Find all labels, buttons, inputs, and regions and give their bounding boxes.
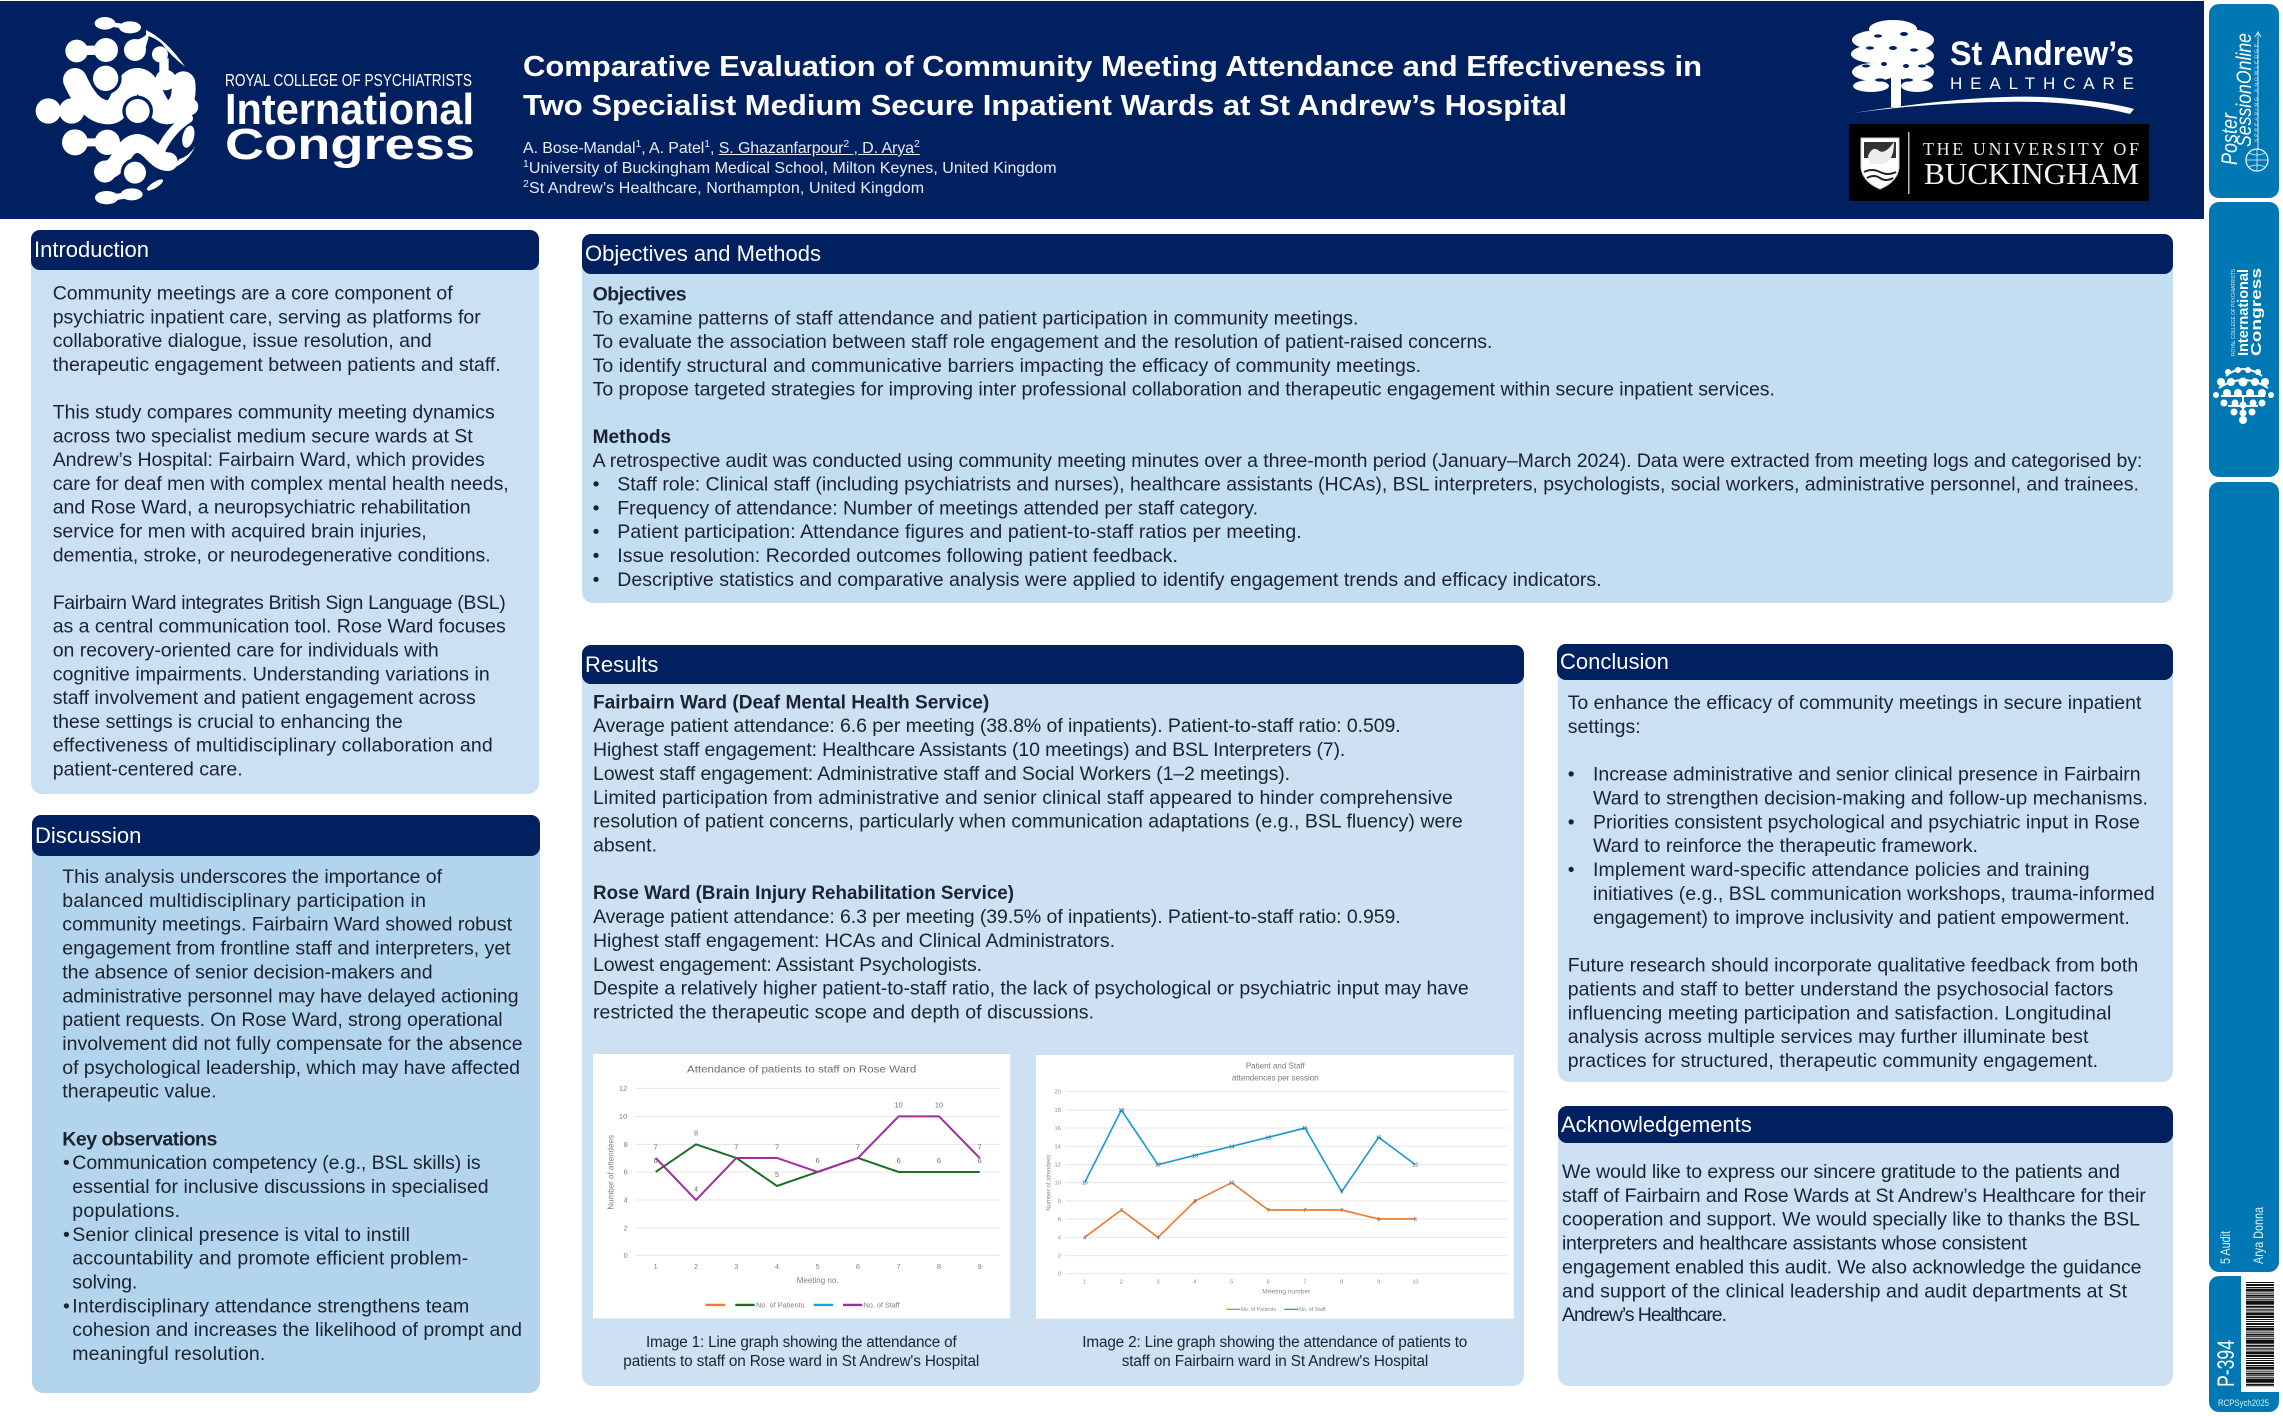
- text block: objectives: To identify structural and communicative barriers impacting the efficacy of community meetings.: [593, 354, 1421, 376]
- text block: Fairbairn Ward results: Average patient attendance: 6.6 per meeting (38.8% of inpatients). Patient-to-staff ratio: 0.509.: [593, 715, 1401, 737]
- logo text: International: [225, 85, 474, 134]
- title: Two Specialist Medium Secure Inpatient Wards at St Andrew’s Hospital: [523, 90, 1567, 122]
- chart: Rose Ward line graph: 2: [624, 1224, 628, 1233]
- text block: acknowledgements: engagement enabled this audit. We also acknowledge the guidance: [1562, 1256, 2142, 1278]
- chart: Rose Ward line graph: 6: [624, 1168, 628, 1177]
- text block: introduction: collaborative dialogue, issue resolution, and: [53, 330, 432, 352]
- chart: Rose Ward line graph: 7: [654, 1142, 658, 1151]
- text block: discussion: solving.: [72, 1272, 137, 1294]
- panel: conclusion: [1558, 650, 2173, 1082]
- legend: No. of Staff: [864, 1302, 900, 1309]
- chart: Rose Ward line graph: 7: [897, 1262, 901, 1271]
- chart: Fairbairn Ward line graph: 4: [1157, 1235, 1160, 1241]
- chart: Fairbairn Ward line graph: 4: [1058, 1235, 1061, 1241]
- chart: Fairbairn Ward line graph: 14: [1229, 1144, 1235, 1150]
- chart: Fairbairn Ward line graph: 7: [1303, 1279, 1307, 1285]
- text block: conclusion: Future research should incorporate qualitative feedback from both: [1568, 954, 2138, 976]
- authors and affiliations: 1University of Buckingham Medical School, Milton Keynes, United Kingdom: [523, 158, 1057, 177]
- icon: small globe: [2213, 367, 2274, 424]
- chart: Fairbairn Ward line graph: 7: [1340, 1208, 1343, 1214]
- sidebar tab: International Congress: [2209, 202, 2279, 477]
- legend: No. of Patients: [756, 1302, 805, 1309]
- panel: introduction: [31, 235, 539, 794]
- heading: acknowledgements: [1558, 1106, 2173, 1143]
- text block: methods: Staff role: Clinical staff (including psychiatrists and nurses), healthcare assistants (HCAs), BSL interpreters, psychologists, social workers, administrative personnel, and trainees.: [617, 474, 2139, 496]
- swoosh and wordmark: HEALTHCARE: [1950, 74, 2134, 93]
- chart: Rose Ward line graph: 6: [978, 1156, 982, 1165]
- text block: Rose Ward results: Average patient attendance: 6.3 per meeting (39.5% of inpatients). Patient-to-staff ratio: 0.959.: [593, 906, 1401, 928]
- text block: conclusion: engagement) to improve inclusivity and patient empowerment.: [1593, 906, 2130, 928]
- sidebar tab: International Congress: ROYAL COLLEGE OF PSYCHIATRISTS: [2231, 269, 2237, 356]
- text block: conclusion: Increase administrative and senior clinical presence in Fairbairn: [1593, 763, 2141, 785]
- caption: image 2: Image 2: Line graph showing the attendance of patients to: [1082, 1334, 1467, 1351]
- text block: discussion: patient requests. On Rose Ward, strong operational: [62, 1009, 503, 1031]
- icon: shield: [1861, 138, 1899, 189]
- panel: results: [582, 650, 1524, 1386]
- text block: methods: •: [593, 474, 600, 496]
- text block: conclusion: influencing meeting participation and satisfaction. Longitudinal: [1568, 1002, 2111, 1024]
- text block: Fairbairn Ward results: resolution of patient concerns, particularly when communication adaptations (e.g., BSL fluency) were: [593, 810, 1463, 832]
- text block: methods: A retrospective audit was conducted using community meeting minutes over a three-month period (January–March 2024). Data were extracted from meeting logs and categorised by:: [593, 450, 2142, 472]
- chart: Fairbairn Ward line graph: 6: [1414, 1217, 1417, 1223]
- text block: discussion: balanced multidisciplinary participation in: [62, 890, 426, 912]
- chart: Fairbairn Ward line graph: 9: [1377, 1279, 1380, 1285]
- text block: Fairbairn Ward results: Lowest staff engagement: Administrative staff and Social Workers (1–2 meetings).: [593, 762, 1290, 784]
- text block: discussion: [62, 866, 523, 1365]
- authors and affiliations: A. Bose-Mandal1, A. Patel1, S. Ghazanfarpour2 , D. Arya2: [523, 138, 920, 157]
- chart: Rose Ward line graph: 10: [935, 1100, 943, 1109]
- text block: discussion: community meetings. Fairbairn Ward showed robust: [62, 914, 513, 936]
- text block: discussion: essential for inclusive discussions in specialised: [72, 1176, 489, 1198]
- text block: objectives: To propose targeted strategies for improving inter professional collaboration and therapeutic engagement within secure inpatient services.: [593, 378, 1775, 400]
- text block: conclusion: patients and staff to better understand the psychosocial factors: [1568, 978, 2114, 1000]
- text block: discussion: Key observations: [62, 1128, 217, 1150]
- chart: Fairbairn Ward line graph: 10: [1412, 1279, 1418, 1285]
- text block: methods: [592, 426, 2142, 591]
- caption: image 2: [1082, 1334, 1467, 1370]
- title: [523, 51, 1702, 122]
- legend: [705, 1302, 900, 1309]
- logo text: Congress: [225, 120, 475, 169]
- logo: RCPsych International Congress: [36, 17, 475, 204]
- chart: Rose Ward line graph: 5: [816, 1262, 820, 1271]
- caption: image 2: staff on Fairbairn ward in St Andrew's Hospital: [1122, 1353, 1428, 1370]
- text block: conclusion: •: [1568, 858, 1575, 880]
- sidebar tab: International Congress: International: [2235, 269, 2252, 356]
- caption: image 1: Image 1: Line graph showing the attendance of: [646, 1334, 957, 1351]
- chart: Rose Ward line graph: 8: [694, 1128, 698, 1137]
- text block: methods: Issue resolution: Recorded outcomes following patient feedback.: [617, 545, 1178, 567]
- chart: Fairbairn Ward line graph: Meeting number: [1262, 1289, 1311, 1296]
- text block: conclusion: •: [1568, 763, 1575, 785]
- text block: discussion: Communication competency (e.g., BSL skills) is: [72, 1152, 481, 1174]
- text block: Rose Ward results: Highest staff engagement: HCAs and Clinical Administrators.: [593, 929, 1115, 951]
- text block: introduction: effectiveness of multidisciplinary collaboration and: [53, 735, 493, 757]
- text block: conclusion: Priorities consistent psychological and psychiatric input in Rose: [1593, 811, 2140, 833]
- swoosh and wordmark: St Andrew’s: [1950, 35, 2134, 73]
- chart: Fairbairn Ward line graph: 2: [1058, 1254, 1061, 1260]
- sidebar tab: poster number and barcode: RCPSych2025: [2218, 1398, 2269, 1409]
- text block: acknowledgements: cooperation and support. We would specially like to thanks the BSL: [1562, 1209, 2140, 1231]
- text block: objectives: Objectives: [593, 283, 687, 305]
- logo: University of Buckingham: [1849, 124, 2149, 201]
- chart: Fairbairn Ward line graph: 18: [1118, 1108, 1124, 1114]
- panel: discussion: [32, 820, 540, 1393]
- logo text: [225, 70, 475, 169]
- text block: introduction: psychiatric inpatient care, serving as platforms for: [53, 306, 481, 328]
- sidebar tab: poster number and barcode: [2209, 1276, 2279, 1412]
- text block: introduction: This study compares community meeting dynamics: [53, 402, 495, 424]
- text block: acknowledgements: interpreters and healthcare assistants whose consistent: [1562, 1233, 2028, 1255]
- chart: Rose Ward line graph: 4: [624, 1196, 628, 1205]
- text block: methods: Patient participation: Attendance figures and patient-to-staff ratios per meeting.: [617, 521, 1302, 543]
- text block: objectives: [593, 283, 1775, 400]
- text block: introduction: Community meetings are a core component of: [53, 282, 453, 304]
- heading: results: Results: [585, 652, 658, 676]
- chart: Rose Ward line graph: 4: [694, 1185, 698, 1194]
- chart: Fairbairn Ward line graph: 15: [1265, 1135, 1271, 1141]
- text block: discussion: •: [63, 1295, 70, 1317]
- text block: Rose Ward results: Despite a relatively higher patient-to-staff ratio, the lack of psychological or psychiatric input may have: [593, 977, 1469, 999]
- text block: Fairbairn Ward results: Limited participation from administrative and senior clinical staff appeared to hinder comprehensive: [593, 786, 1453, 808]
- chart: Rose Ward line graph: 7: [734, 1142, 738, 1151]
- chart: Rose Ward line graph: 6: [937, 1156, 941, 1165]
- text block: Rose Ward results: [593, 882, 1469, 1023]
- heading: objectives and methods: [582, 234, 2173, 274]
- text block: Rose Ward results: restricted the therapeutic scope and depth of discussions.: [593, 1001, 1094, 1023]
- chart: Fairbairn Ward line graph: 16: [1302, 1126, 1308, 1132]
- chart: Fairbairn Ward line graph: 18: [1055, 1108, 1061, 1114]
- chart: Fairbairn Ward line graph: 2: [1120, 1279, 1123, 1285]
- text block: objectives: To evaluate the association between staff role engagement and the resolution of patient-raised concerns.: [593, 331, 1492, 353]
- chart: Rose Ward line graph: 12: [619, 1084, 627, 1093]
- panel: acknowledgements: [1558, 1112, 2173, 1386]
- chart: Fairbairn Ward line graph: 12: [1412, 1163, 1418, 1169]
- chart: Fairbairn Ward line graph: Number of attendees: [1046, 1155, 1052, 1211]
- chart: Fairbairn Ward line graph: 14: [1055, 1144, 1061, 1150]
- heading: introduction: Introduction: [34, 237, 149, 262]
- chart: Rose Ward line graph: Number of attendees: [607, 1135, 616, 1210]
- text block: discussion: the absence of senior decision-makers and: [62, 961, 433, 983]
- text block: Fairbairn Ward results: Highest staff engagement: Healthcare Assistants (10 meetings) and BSL Interpreters (7).: [593, 739, 1345, 761]
- chart: Rose Ward line graph: 6: [654, 1156, 658, 1165]
- text block: conclusion: settings:: [1568, 715, 1641, 737]
- text block: conclusion: To enhance the efficacy of community meetings in secure inpatient: [1568, 692, 2142, 714]
- chart: Rose Ward line graph: 1: [654, 1262, 658, 1271]
- chart: Fairbairn Ward line graph: 6: [1058, 1217, 1061, 1223]
- icon: globe of linked blobs: [36, 17, 197, 204]
- chart: Fairbairn Ward line graph: 3: [1156, 1279, 1160, 1285]
- text block: conclusion: practices for structured, therapeutic community engagement.: [1568, 1050, 2098, 1072]
- text block: methods: Frequency of attendance: Number of meetings attended per staff category.: [617, 497, 1258, 519]
- text block: introduction: as a central communication tool. Rose Ward focuses: [53, 616, 506, 638]
- legend: No. of Patients: [1241, 1307, 1276, 1313]
- authors and affiliations: [523, 138, 1057, 197]
- text block: discussion: This analysis underscores the importance of: [62, 866, 443, 888]
- legend: No. of Staff: [1299, 1307, 1326, 1313]
- chart: Fairbairn Ward line graph: [1036, 1055, 1514, 1319]
- text block: discussion: of psychological leadership, which may have affected: [62, 1057, 520, 1079]
- text block: discussion: administrative personnel may have delayed actioning: [62, 985, 519, 1007]
- chart: Fairbairn Ward line graph: attendences per session: [1232, 1073, 1319, 1082]
- text block: introduction: patient-centered care.: [53, 758, 243, 780]
- heading: discussion: [32, 815, 540, 856]
- heading: objectives and methods: Objectives and Methods: [585, 241, 821, 266]
- text block: discussion: Interdisciplinary attendance strengthens team: [72, 1295, 469, 1317]
- text block: introduction: these settings is crucial to enhancing the: [53, 711, 403, 733]
- text block: discussion: Senior clinical presence is vital to instill: [72, 1224, 410, 1246]
- heading: results: [582, 645, 1524, 684]
- text block: introduction: Andrew’s Hospital: Fairbairn Ward, which provides: [53, 449, 485, 471]
- text block: discussion: populations.: [72, 1200, 180, 1222]
- text block: Fairbairn Ward results: Fairbairn Ward (Deaf Mental Health Service): [593, 691, 989, 713]
- chart: Fairbairn Ward line graph: 1: [1083, 1279, 1086, 1285]
- chart: Rose Ward line graph: [593, 1054, 1010, 1318]
- text block: methods: •: [593, 497, 600, 519]
- text block: acknowledgements: and support of the clinical leadership and audit departments at St: [1562, 1280, 2128, 1302]
- caption: image 1: patients to staff on Rose ward in St Andrew's Hospital: [623, 1353, 979, 1370]
- text block: conclusion: Ward to reinforce the therapeutic framework.: [1593, 835, 1978, 857]
- chart: Fairbairn Ward line graph: 13: [1192, 1153, 1198, 1159]
- chart: Fairbairn Ward line graph: 6: [1267, 1279, 1270, 1285]
- chart: Fairbairn Ward line graph: 15: [1376, 1135, 1382, 1141]
- text block: discussion: •: [63, 1152, 70, 1174]
- chart: Rose Ward line graph: 6: [897, 1156, 901, 1165]
- chart: Fairbairn Ward line graph: 4: [1083, 1235, 1086, 1241]
- chart: Rose Ward line graph: 9: [978, 1262, 982, 1271]
- logo: University of Buckingham: THE UNIVERSITY OF: [1923, 139, 2139, 159]
- heading: conclusion: [1557, 644, 2173, 680]
- chart: Rose Ward line graph: 8: [937, 1262, 941, 1271]
- text block: Fairbairn Ward results: absent.: [593, 834, 657, 856]
- text block: methods: Descriptive statistics and comparative analysis were applied to identify engagement trends and efficacy indicators.: [617, 569, 1602, 591]
- sidebar tab: International Congress: Congress: [2248, 268, 2265, 356]
- heading: introduction: [31, 230, 539, 270]
- legend: [1226, 1307, 1326, 1313]
- text block: discussion: meaningful resolution.: [72, 1343, 265, 1365]
- chart: Fairbairn Ward line graph: 8: [1194, 1199, 1197, 1205]
- text block: acknowledgements: staff of Fairbairn and Rose Wards at St Andrew’s Healthcare for their: [1562, 1185, 2146, 1207]
- text block: Rose Ward results: Lowest engagement: Assistant Psychologists.: [593, 953, 982, 975]
- chart: Fairbairn Ward line graph: Patient and Staff: [1246, 1062, 1306, 1071]
- chart: Fairbairn Ward line graph: 10: [1082, 1181, 1088, 1187]
- text block: conclusion: •: [1568, 811, 1575, 833]
- swoosh and wordmark: [1853, 35, 2134, 114]
- text block: conclusion: analysis across multiple services may further illuminate best: [1568, 1026, 2089, 1048]
- chart: Rose Ward line graph: 6: [816, 1156, 820, 1165]
- text block: Rose Ward results: Rose Ward (Brain Injury Rehabilitation Service): [593, 882, 1014, 904]
- chart: Fairbairn Ward line graph: 6: [1377, 1217, 1380, 1223]
- sidebar tab: Poster Session Online: [2209, 4, 2279, 198]
- chart: Fairbairn Ward line graph: 7: [1267, 1208, 1270, 1214]
- caption: image 1: [623, 1334, 979, 1370]
- logo: University of Buckingham: BUCKINGHAM: [1924, 156, 2139, 191]
- chart: Rose Ward line graph: Meeting no.: [797, 1276, 839, 1285]
- chart: Fairbairn Ward line graph: 9: [1340, 1190, 1343, 1196]
- sidebar tab: poster number and barcode: P-394: [2213, 1340, 2240, 1387]
- text block: objectives: To examine patterns of staff attendance and patient participation in community meetings.: [593, 307, 1358, 329]
- chart: Fairbairn Ward line graph: 12: [1055, 1163, 1061, 1169]
- chart: Rose Ward line graph: 4: [775, 1262, 779, 1271]
- text block: introduction: on recovery-oriented care for individuals with: [53, 640, 439, 662]
- heading: discussion: Discussion: [35, 822, 141, 848]
- chart: Rose Ward line graph: 10: [895, 1100, 903, 1109]
- text block: conclusion: Ward to strengthen decision-making and follow-up mechanisms.: [1593, 787, 2148, 809]
- text block: introduction: [52, 282, 509, 780]
- sidebar tab: Poster Session Online: SPREADING KNOWLEDGE: [2254, 44, 2260, 142]
- chart: Rose Ward line graph: 0: [624, 1251, 628, 1260]
- text block: introduction: cognitive impairments. Understanding variations in: [53, 663, 490, 685]
- chart: Fairbairn Ward line graph: 0: [1058, 1272, 1061, 1278]
- text block: acknowledgements: We would like to express our sincere gratitude to the patients and: [1562, 1161, 2120, 1183]
- chart: Fairbairn Ward line graph: 16: [1055, 1126, 1061, 1132]
- chart: Fairbairn Ward line graph: 20: [1055, 1090, 1061, 1096]
- text block: Fairbairn Ward results: [593, 691, 1463, 856]
- sidebar tab: presenter and category: 5 Audit: [2217, 1231, 2233, 1264]
- title: Comparative Evaluation of Community Meeting Attendance and Effectiveness in: [523, 51, 1702, 83]
- logo text: ROYAL COLLEGE OF PSYCHIATRISTS: [225, 70, 472, 90]
- heading: conclusion: Conclusion: [1560, 649, 1669, 674]
- chart: Rose Ward line graph: 7: [856, 1142, 860, 1151]
- sidebar tab: Poster Session Online: SessionOnline: [2233, 33, 2256, 147]
- text block: conclusion: initiatives (e.g., BSL communication workshops, trauma-informed: [1593, 882, 2155, 904]
- logo: St Andrew's Healthcare: [1851, 20, 2134, 114]
- chart: Rose Ward line graph: 2: [694, 1262, 698, 1271]
- panel: objectives and methods: [582, 240, 2173, 603]
- text block: discussion: •: [63, 1224, 70, 1246]
- text block: methods: Methods: [593, 426, 671, 448]
- text block: introduction: dementia, stroke, or neurodegenerative conditions.: [53, 544, 491, 566]
- text block: discussion: therapeutic value.: [62, 1081, 217, 1103]
- text block: acknowledgements: Andrew’s Healthcare.: [1562, 1304, 1727, 1326]
- text block: introduction: staff involvement and patient engagement across: [53, 687, 476, 709]
- sidebar tab: presenter and category: [2209, 482, 2279, 1272]
- heading: acknowledgements: Acknowledgements: [1561, 1112, 1752, 1136]
- chart: Fairbairn Ward line graph: 10: [1055, 1181, 1061, 1187]
- chart: Fairbairn Ward line graph: 4: [1193, 1279, 1197, 1285]
- chart: Rose Ward line graph: Attendance of patients to staff on Rose Ward: [687, 1064, 916, 1075]
- text block: introduction: service for men with acquired brain injuries,: [53, 520, 427, 542]
- chart: Rose Ward line graph: 7: [978, 1142, 982, 1151]
- text block: discussion: engagement from frontline staff and interpreters, yet: [62, 938, 511, 960]
- authors and affiliations: 2St Andrew’s Healthcare, Northampton, United Kingdom: [523, 178, 924, 197]
- chart: Fairbairn Ward line graph: 5: [1230, 1279, 1233, 1285]
- chart: Rose Ward line graph: 6: [856, 1262, 860, 1271]
- text block: conclusion: [1568, 692, 2155, 1072]
- text block: methods: •: [593, 569, 600, 591]
- text block: introduction: therapeutic engagement between patients and staff.: [53, 354, 501, 376]
- text block: conclusion: Implement ward-specific attendance policies and training: [1593, 858, 2090, 880]
- chart: Rose Ward line graph: 10: [619, 1112, 627, 1121]
- sidebar tab: presenter and category: Arya Donna: [2250, 1207, 2266, 1264]
- text block: methods: •: [593, 521, 600, 543]
- header banner: [0, 1, 2204, 219]
- chart: Rose Ward line graph: 3: [734, 1262, 738, 1271]
- sidebar tab: Poster Session Online: Poster: [2217, 112, 2242, 165]
- chart: Fairbairn Ward line graph: 12: [1155, 1163, 1161, 1169]
- chart: Fairbairn Ward line graph: 7: [1120, 1208, 1123, 1214]
- chart: Fairbairn Ward line graph: 7: [1304, 1208, 1307, 1214]
- text block: introduction: care for deaf men with complex mental health needs,: [53, 473, 509, 495]
- chart: Fairbairn Ward line graph: 10: [1229, 1181, 1235, 1187]
- chart: Rose Ward line graph: 5: [775, 1170, 779, 1179]
- chart: Fairbairn Ward line graph: 8: [1340, 1279, 1343, 1285]
- chart: Rose Ward line graph: 7: [775, 1142, 779, 1151]
- text block: introduction: and Rose Ward, a neuropsychiatric rehabilitation: [53, 497, 471, 519]
- text block: methods: •: [593, 545, 600, 567]
- icon: tree: [1851, 20, 1934, 107]
- text block: introduction: across two specialist medium secure wards at St: [53, 425, 473, 447]
- text block: discussion: cohesion and increases the likelihood of prompt and: [72, 1319, 522, 1341]
- chart: Rose Ward line graph: 8: [624, 1140, 628, 1149]
- text block: introduction: Fairbairn Ward integrates British Sign Language (BSL): [53, 592, 506, 614]
- text block: discussion: involvement did not fully compensate for the absence: [62, 1033, 523, 1055]
- text block: acknowledgements: [1562, 1161, 2146, 1326]
- text block: discussion: accountability and promote efficient problem-: [72, 1248, 468, 1270]
- chart: Fairbairn Ward line graph: 8: [1058, 1199, 1061, 1205]
